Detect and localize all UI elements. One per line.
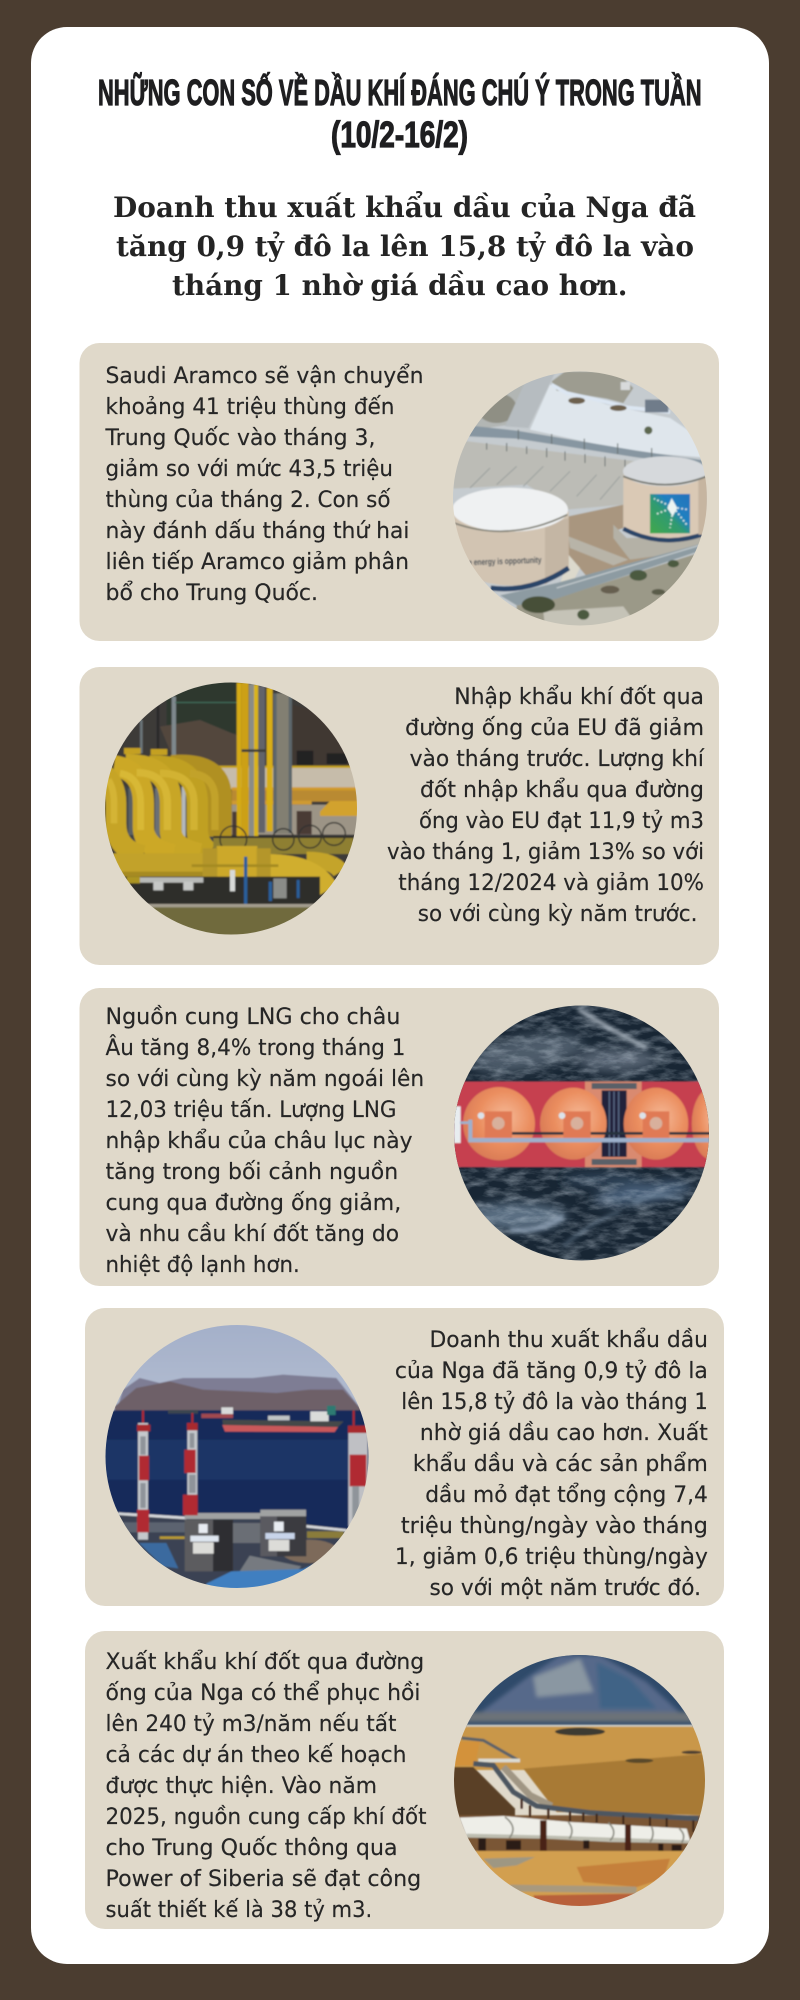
text: Russian oil export revenue	[395, 1328, 708, 1601]
text: Russian oil export revenue: dầu mỏ đạt tổng cộng 7,4	[425, 1483, 708, 1508]
panel: LNG supply to Europe	[80, 988, 732, 1286]
text: Saudi Aramco: giảm so với mức 43,5 triệu	[106, 457, 393, 482]
text: EU pipeline gas imports: vào tháng 1, giảm 13% so với	[387, 840, 704, 865]
text: Saudi Aramco: bổ cho Trung Quốc.	[106, 581, 318, 606]
panel: EU pipeline gas imports	[80, 667, 719, 965]
text: Saudi Aramco: thùng của tháng 2. Con số	[106, 488, 391, 513]
text: Saudi Aramco: này đánh dấu tháng thứ hai	[106, 519, 410, 544]
panel: Saudi Aramco	[80, 343, 719, 641]
subtitle: Doanh thu xuất khẩu dầu của Nga đã	[113, 190, 696, 224]
text: EU pipeline gas imports: vào tháng trước. Lượng khí	[410, 747, 705, 772]
title: (10/2-16/2)	[331, 114, 468, 155]
photo: oil terminal by the sea	[100, 1320, 373, 1593]
subtitle	[113, 190, 696, 302]
text: Saudi Aramco: khoảng 41 triệu thùng đến	[106, 395, 394, 420]
text: Russian pipeline gas exports: cho Trung Quốc thông qua	[106, 1836, 398, 1861]
text: Russian oil export revenue: nhờ giá dầu cao hơn. Xuất	[420, 1421, 708, 1446]
text: Russian pipeline gas exports: Power of Siberia sẽ đạt công	[106, 1867, 421, 1892]
text: Russian pipeline gas exports: được thực hiện. Vào năm	[106, 1774, 377, 1799]
text: Russian pipeline gas exports: cả các dự án theo kế hoạch	[106, 1743, 406, 1768]
text: EU pipeline gas imports: Nhập khẩu khí đốt qua	[454, 685, 704, 710]
text: Russian oil export revenue: lên 15,8 tỷ đô la vào tháng 1	[401, 1390, 708, 1415]
text: LNG supply to Europe: nhập khẩu của châu lục này	[106, 1129, 412, 1154]
text: EU pipeline gas imports: đường ống của EU đã giảm	[405, 716, 704, 741]
text: EU pipeline gas imports: ống vào EU đạt 11,9 tỷ m3	[419, 809, 704, 834]
text: LNG supply to Europe: Nguồn cung LNG cho châu	[106, 1005, 400, 1030]
text: Russian oil export revenue: 1, giảm 0,6 triệu thùng/ngày	[395, 1545, 708, 1570]
photo: Aramco storage tanks: e energy is opportunity	[468, 555, 542, 567]
text: LNG supply to Europe	[106, 1005, 424, 1278]
title	[98, 71, 702, 155]
text: Russian pipeline gas exports: suất thiết kế là 38 tỷ m3.	[106, 1898, 372, 1923]
subtitle: tháng 1 nhờ giá dầu cao hơn.	[172, 269, 628, 302]
panel: Russian oil export revenue	[85, 1308, 724, 1606]
text: LNG supply to Europe: Âu tăng 8,4% trong tháng 1	[106, 1035, 406, 1061]
text: Saudi Aramco: Saudi Aramco sẽ vận chuyển	[106, 364, 424, 389]
text: Saudi Aramco: Trung Quốc vào tháng 3,	[105, 426, 376, 451]
text: Russian pipeline gas exports: Xuất khẩu khí đốt qua đường	[106, 1650, 424, 1675]
text: EU pipeline gas imports: tháng 12/2024 và giảm 10%	[398, 871, 704, 896]
text: LNG supply to Europe: tăng trong bối cảnh nguồn	[106, 1160, 398, 1185]
text: Russian oil export revenue: Doanh thu xuất khẩu dầu	[430, 1328, 708, 1353]
text: LNG supply to Europe: cung qua đường ống giảm,	[106, 1191, 401, 1216]
text: EU pipeline gas imports	[387, 685, 705, 927]
text: LNG supply to Europe: nhiệt độ lạnh hơn.	[106, 1253, 300, 1278]
text: Russian pipeline gas exports: ống của Nga có thể phục hồi	[106, 1681, 420, 1706]
text: LNG supply to Europe: 12,03 triệu tấn. Lượng LNG	[106, 1098, 396, 1123]
photo: Aramco storage tanks	[453, 372, 707, 626]
text: Russian pipeline gas exports: 2025, nguồn cung cấp khí đốt	[106, 1805, 427, 1830]
panel: Russian pipeline gas exports	[85, 1631, 724, 1929]
text: Russian oil export revenue: triệu thùng/ngày vào tháng	[401, 1514, 708, 1539]
text: LNG supply to Europe: so với cùng kỳ năm ngoái lên	[106, 1067, 424, 1092]
photo: pipeline across tundra	[454, 1655, 705, 1906]
text: Saudi Aramco: liên tiếp Aramco giảm phân	[106, 550, 409, 575]
text: LNG supply to Europe: và nhu cầu khí đốt tăng do	[106, 1222, 399, 1247]
text: Russian oil export revenue: so với một năm trước đó.	[430, 1576, 701, 1601]
text: Russian pipeline gas exports	[106, 1650, 427, 1923]
photo: yellow gas pipes	[105, 682, 357, 934]
photo: LNG tanker from above	[454, 1006, 709, 1260]
text: Russian oil export revenue: khẩu dầu và các sản phẩm	[413, 1452, 708, 1477]
text: Russian pipeline gas exports: lên 240 tỷ m3/năm nếu tất	[106, 1712, 397, 1737]
text: Saudi Aramco	[105, 364, 424, 606]
text: Russian oil export revenue: của Nga đã tăng 0,9 tỷ đô la	[395, 1359, 708, 1384]
text: EU pipeline gas imports: so với cùng kỳ năm trước.	[418, 902, 698, 927]
text: EU pipeline gas imports: đốt nhập khẩu qua đường	[420, 778, 704, 803]
subtitle: tăng 0,9 tỷ đô la lên 15,8 tỷ đô la vào	[116, 230, 694, 263]
